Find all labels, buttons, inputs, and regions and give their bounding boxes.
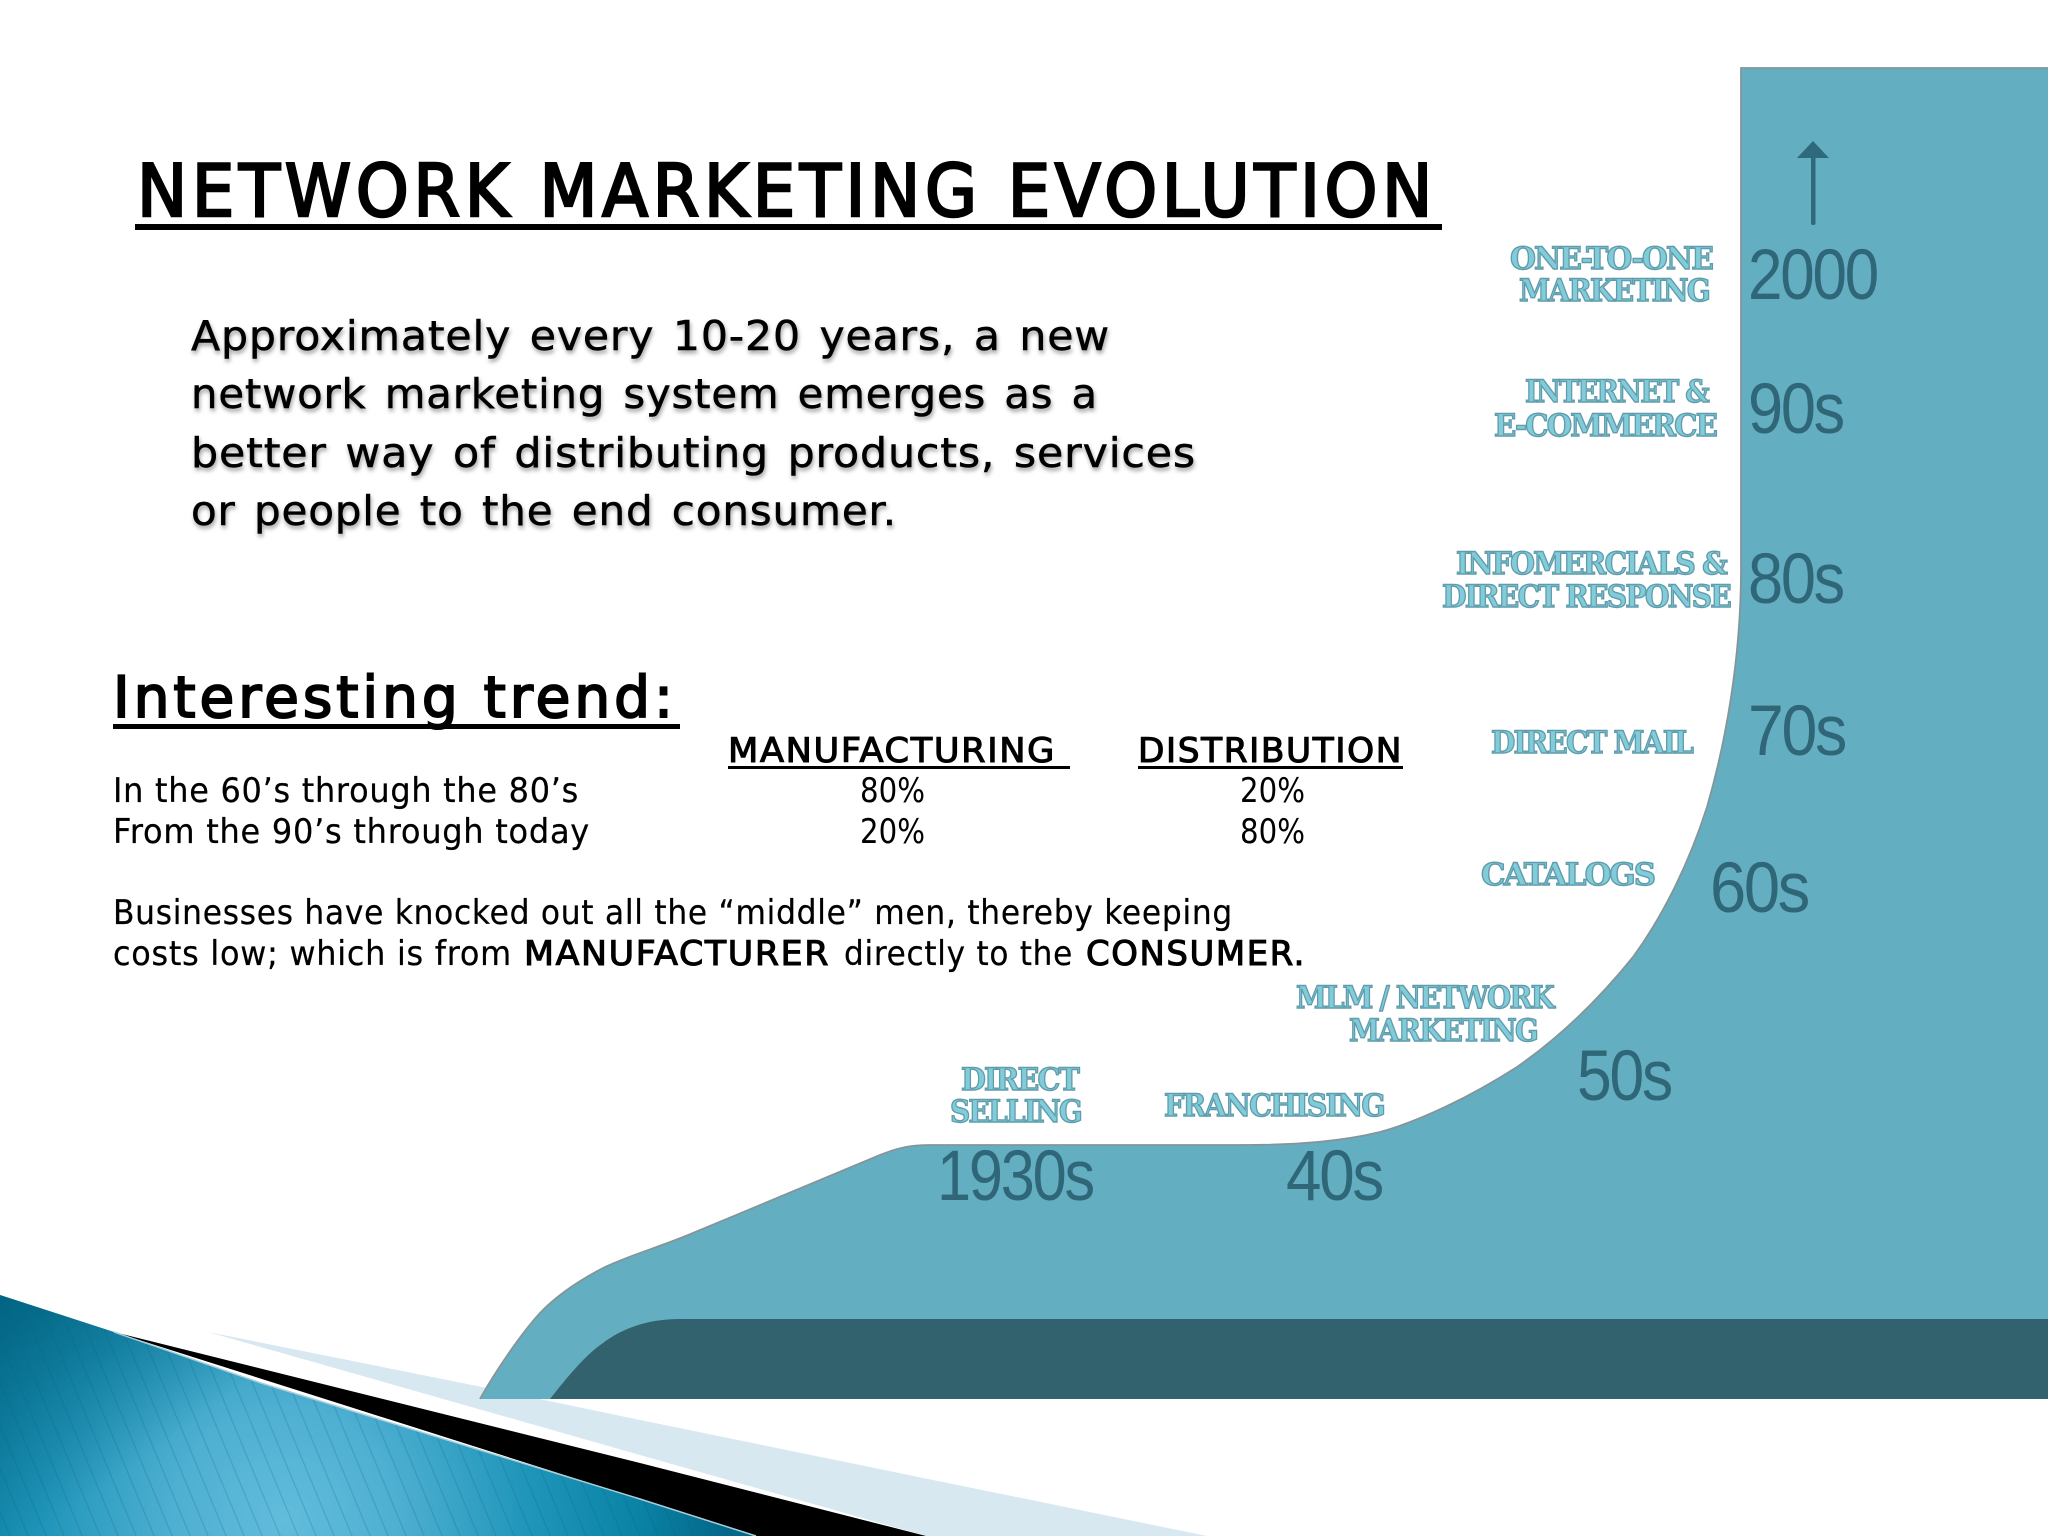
text block: intro paragraph — [191, 312, 1196, 535]
table: manufacturing vs distribution — [113, 731, 1403, 852]
decade: 80s: 80s — [1748, 540, 1843, 619]
decade: 60s: 60s — [1710, 849, 1808, 928]
label: infomercials and direct response: DIRECT RESPONSE — [1442, 579, 1731, 615]
row: 60s through 80s: 80% — [860, 771, 925, 811]
decade: 50s: 50s — [1577, 1037, 1671, 1116]
row: 60s through 80s: In the 60’s through the 80’s — [113, 771, 579, 811]
label: mlm network marketing: MARKETING — [1349, 1013, 1537, 1049]
row: 90s through today: 20% — [860, 812, 925, 852]
label: mlm network marketing: MLM / NETWORK — [1296, 980, 1556, 1016]
chart labels: decades — [937, 236, 1877, 1216]
column header: distribution: DISTRIBUTION — [1138, 731, 1403, 771]
decade: 2000: 2000 — [1748, 236, 1877, 315]
chart labels: marketing channels — [950, 241, 1731, 1130]
text block: conclusion — [113, 893, 1306, 974]
label: direct selling: SELLING — [950, 1094, 1081, 1130]
row: 90s through today — [113, 812, 1305, 852]
label: one-to-one marketing: ONE-TO-ONE — [1510, 241, 1713, 277]
label: franchising: FRANCHISING — [1164, 1088, 1384, 1124]
label: internet and e-commerce — [1494, 374, 1717, 444]
label: direct mail: DIRECT MAIL — [1491, 725, 1694, 761]
decade: 1930s: 1930s — [937, 1137, 1093, 1216]
decade: 90s: 90s — [1748, 370, 1843, 449]
chart: growth curve area — [480, 68, 2048, 1399]
row: 60s through 80s: 20% — [1240, 771, 1305, 811]
label: direct selling: DIRECT — [961, 1062, 1080, 1098]
column header: manufacturing: MANUFACTURING — [728, 731, 1056, 771]
decade: 70s: 70s — [1748, 692, 1845, 771]
label: internet and e-commerce: INTERNET & — [1525, 374, 1710, 410]
label: internet and e-commerce: E-COMMERCE — [1494, 408, 1717, 444]
label: one-to-one marketing: MARKETING — [1519, 273, 1709, 309]
title: NETWORK MARKETING EVOLUTION — [137, 149, 1437, 233]
panel: bottom-left decorative corner — [0, 1295, 1207, 1536]
decade: 40s: 40s — [1286, 1137, 1382, 1216]
text block: intro paragraph: better way of distributing products, services — [191, 429, 1196, 477]
label: infomercials and direct response: INFOMERCIALS & — [1456, 546, 1728, 582]
text block: conclusion: directly to the — [844, 934, 1073, 974]
text block: conclusion: Businesses have knocked out all the “middle” men, thereby keeping — [113, 893, 1233, 933]
row: 90s through today: From the 90’s through today — [113, 812, 590, 852]
heading: interesting trend: Interesting trend: — [113, 665, 677, 731]
text block: intro paragraph: Approximately every 10-20 years, a new — [191, 312, 1110, 360]
label: one-to-one marketing — [1510, 241, 1713, 309]
label: mlm network marketing — [1296, 980, 1556, 1049]
row: 90s through today: 80% — [1240, 812, 1305, 852]
text block: intro paragraph: or people to the end consumer. — [191, 487, 897, 535]
text block: intro paragraph: network marketing system emerges as a — [191, 370, 1098, 418]
row: 60s through 80s — [113, 771, 1305, 811]
icon: up arrow — [1797, 141, 1829, 225]
text block: conclusion: MANUFACTURER — [524, 934, 830, 974]
label: catalogs: CATALOGS — [1481, 857, 1655, 893]
text block: conclusion: CONSUMER. — [1086, 934, 1306, 974]
label: direct selling — [950, 1062, 1081, 1130]
text block: conclusion: costs low; which is from — [113, 934, 512, 974]
label: infomercials and direct response — [1442, 546, 1731, 615]
